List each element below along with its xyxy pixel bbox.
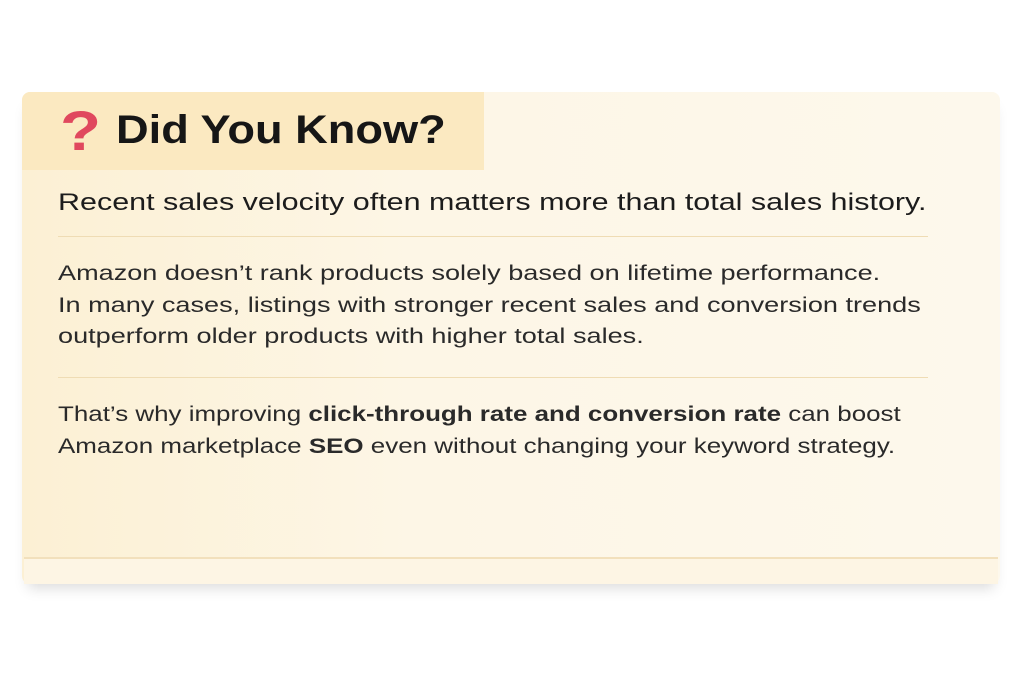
paragraph 1 (58, 262, 921, 348)
paragraph 1: In many cases, listings with stronger recent sales and conversion trends (58, 294, 921, 316)
paragraph 1: outperform older products with higher total sales. (58, 325, 644, 348)
paragraph 1: Amazon doesn’t rank products solely based on lifetime performance. (58, 262, 880, 285)
icon: question mark: ? (60, 99, 101, 162)
subtitle: Recent sales velocity often matters more than total sales history. (58, 189, 927, 216)
header band (22, 92, 484, 170)
bottom strip (24, 557, 998, 584)
title: Did You Know? (116, 108, 446, 152)
card panel (22, 92, 1000, 584)
paragraph 2: That’s why improving click-through rate and conversion rate can boost (58, 403, 901, 426)
paragraph 2 (58, 403, 901, 458)
paragraph 2: Amazon marketplace SEO even without changing your keyword strategy. (58, 434, 895, 458)
